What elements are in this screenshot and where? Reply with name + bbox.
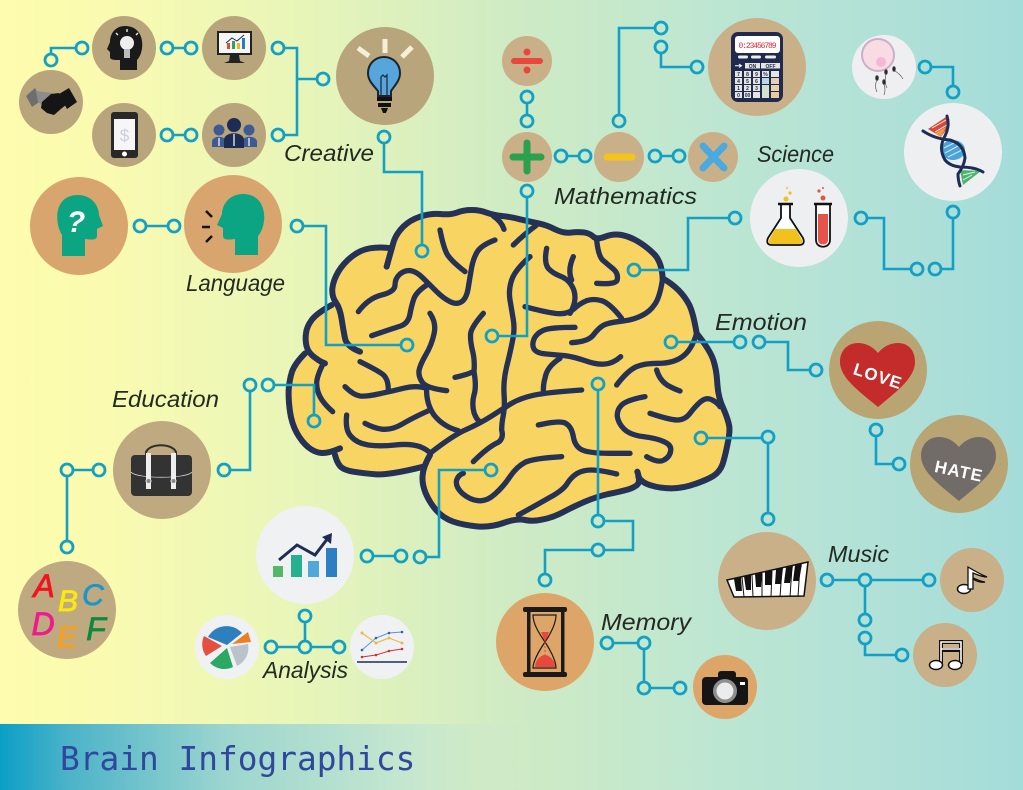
- connectors: mathematics: [486, 22, 703, 342]
- connectors: memory: [539, 378, 686, 694]
- icon: music note: [940, 548, 1004, 612]
- connectors: emotion: [665, 336, 905, 470]
- icon: head with bulb: [92, 16, 156, 80]
- icon: alphabet: C: [82, 579, 104, 612]
- icon: handshake: [19, 70, 83, 134]
- icon: alphabet: D: [31, 606, 55, 642]
- icon: line chart: [350, 615, 414, 679]
- icon: flask and test tube: [750, 169, 848, 267]
- icon: smartphone: [92, 103, 156, 167]
- icon: calculator: 5: [746, 79, 749, 85]
- icon: love heart: [829, 321, 927, 419]
- icon: alphabet: F: [86, 611, 108, 647]
- connectors: language: [134, 220, 413, 351]
- label: Memory: Memory: [601, 609, 693, 635]
- icon: calculator: OFF: [766, 64, 776, 70]
- icon: DNA helix: [904, 103, 1002, 201]
- icon: calculator: 2: [746, 86, 749, 92]
- icon: head with question: [30, 177, 128, 275]
- icon: bar chart with arrow: [256, 506, 354, 604]
- title banner: [0, 724, 570, 790]
- icon: smartphone: $: [120, 126, 130, 145]
- label: Science: Science: [757, 141, 834, 167]
- connectors: science: [628, 61, 959, 276]
- label: Language: Language: [186, 270, 285, 296]
- icon: calculator: 00: [745, 93, 750, 99]
- label: Emotion: Emotion: [715, 309, 807, 335]
- label: Music: Music: [828, 541, 890, 567]
- icon: hate heart: [910, 415, 1008, 513]
- icon: calculator: ON: [749, 64, 757, 70]
- icon: head with question: ?: [67, 206, 85, 239]
- icon: egg and sperm: [852, 35, 916, 99]
- icon: people: [202, 103, 266, 167]
- icon: plus: [502, 132, 552, 182]
- icon: calculator: 4: [737, 79, 740, 85]
- icon: alphabet: A: [31, 568, 55, 604]
- icon: speaking head: [184, 175, 282, 273]
- icon: piano keyboard: [718, 532, 816, 630]
- icon: minus: [594, 132, 644, 182]
- icon: calculator: 1: [737, 86, 740, 92]
- icon: calculator: %: [763, 72, 768, 78]
- icon: love heart: LOVE: [851, 360, 905, 393]
- icon: calculator: [708, 18, 806, 116]
- connectors: music: [695, 431, 935, 661]
- icon: calculator: 7: [737, 72, 740, 78]
- icon: beamed notes: [913, 623, 977, 687]
- icon: pie chart: [195, 615, 259, 679]
- icon: hourglass: [496, 593, 594, 691]
- icon: light bulb: [336, 27, 434, 125]
- icon: hate heart: HATE: [933, 457, 985, 486]
- icon: calculator: 0: [737, 93, 740, 99]
- connectors: education: [61, 379, 320, 553]
- icon: divide: [502, 36, 552, 86]
- connectors: creative: [45, 42, 428, 257]
- brain: [288, 210, 730, 528]
- icon: briefcase: [113, 421, 211, 519]
- icon: calculator: 9: [755, 72, 758, 78]
- connectors: analysis: [265, 464, 497, 653]
- label: Creative: Creative: [284, 140, 374, 166]
- icon: multiply: [688, 132, 738, 182]
- icon: calculator: 0:23456789: [738, 42, 777, 51]
- title banner: Brain Infographics: [60, 740, 415, 778]
- label: Analysis: Analysis: [261, 657, 348, 683]
- icon: alphabet: E: [57, 621, 78, 654]
- icon: calculator: 8: [746, 72, 749, 78]
- icon: alphabet: [18, 561, 116, 659]
- label: Education: Education: [112, 386, 219, 412]
- label: Mathematics: Mathematics: [554, 183, 698, 209]
- icon: alphabet: B: [58, 585, 78, 618]
- icon: monitor chart: [202, 16, 266, 80]
- icon: camera: [693, 655, 757, 719]
- icon: calculator: 3: [755, 86, 758, 92]
- icon: calculator: 6: [755, 79, 758, 85]
